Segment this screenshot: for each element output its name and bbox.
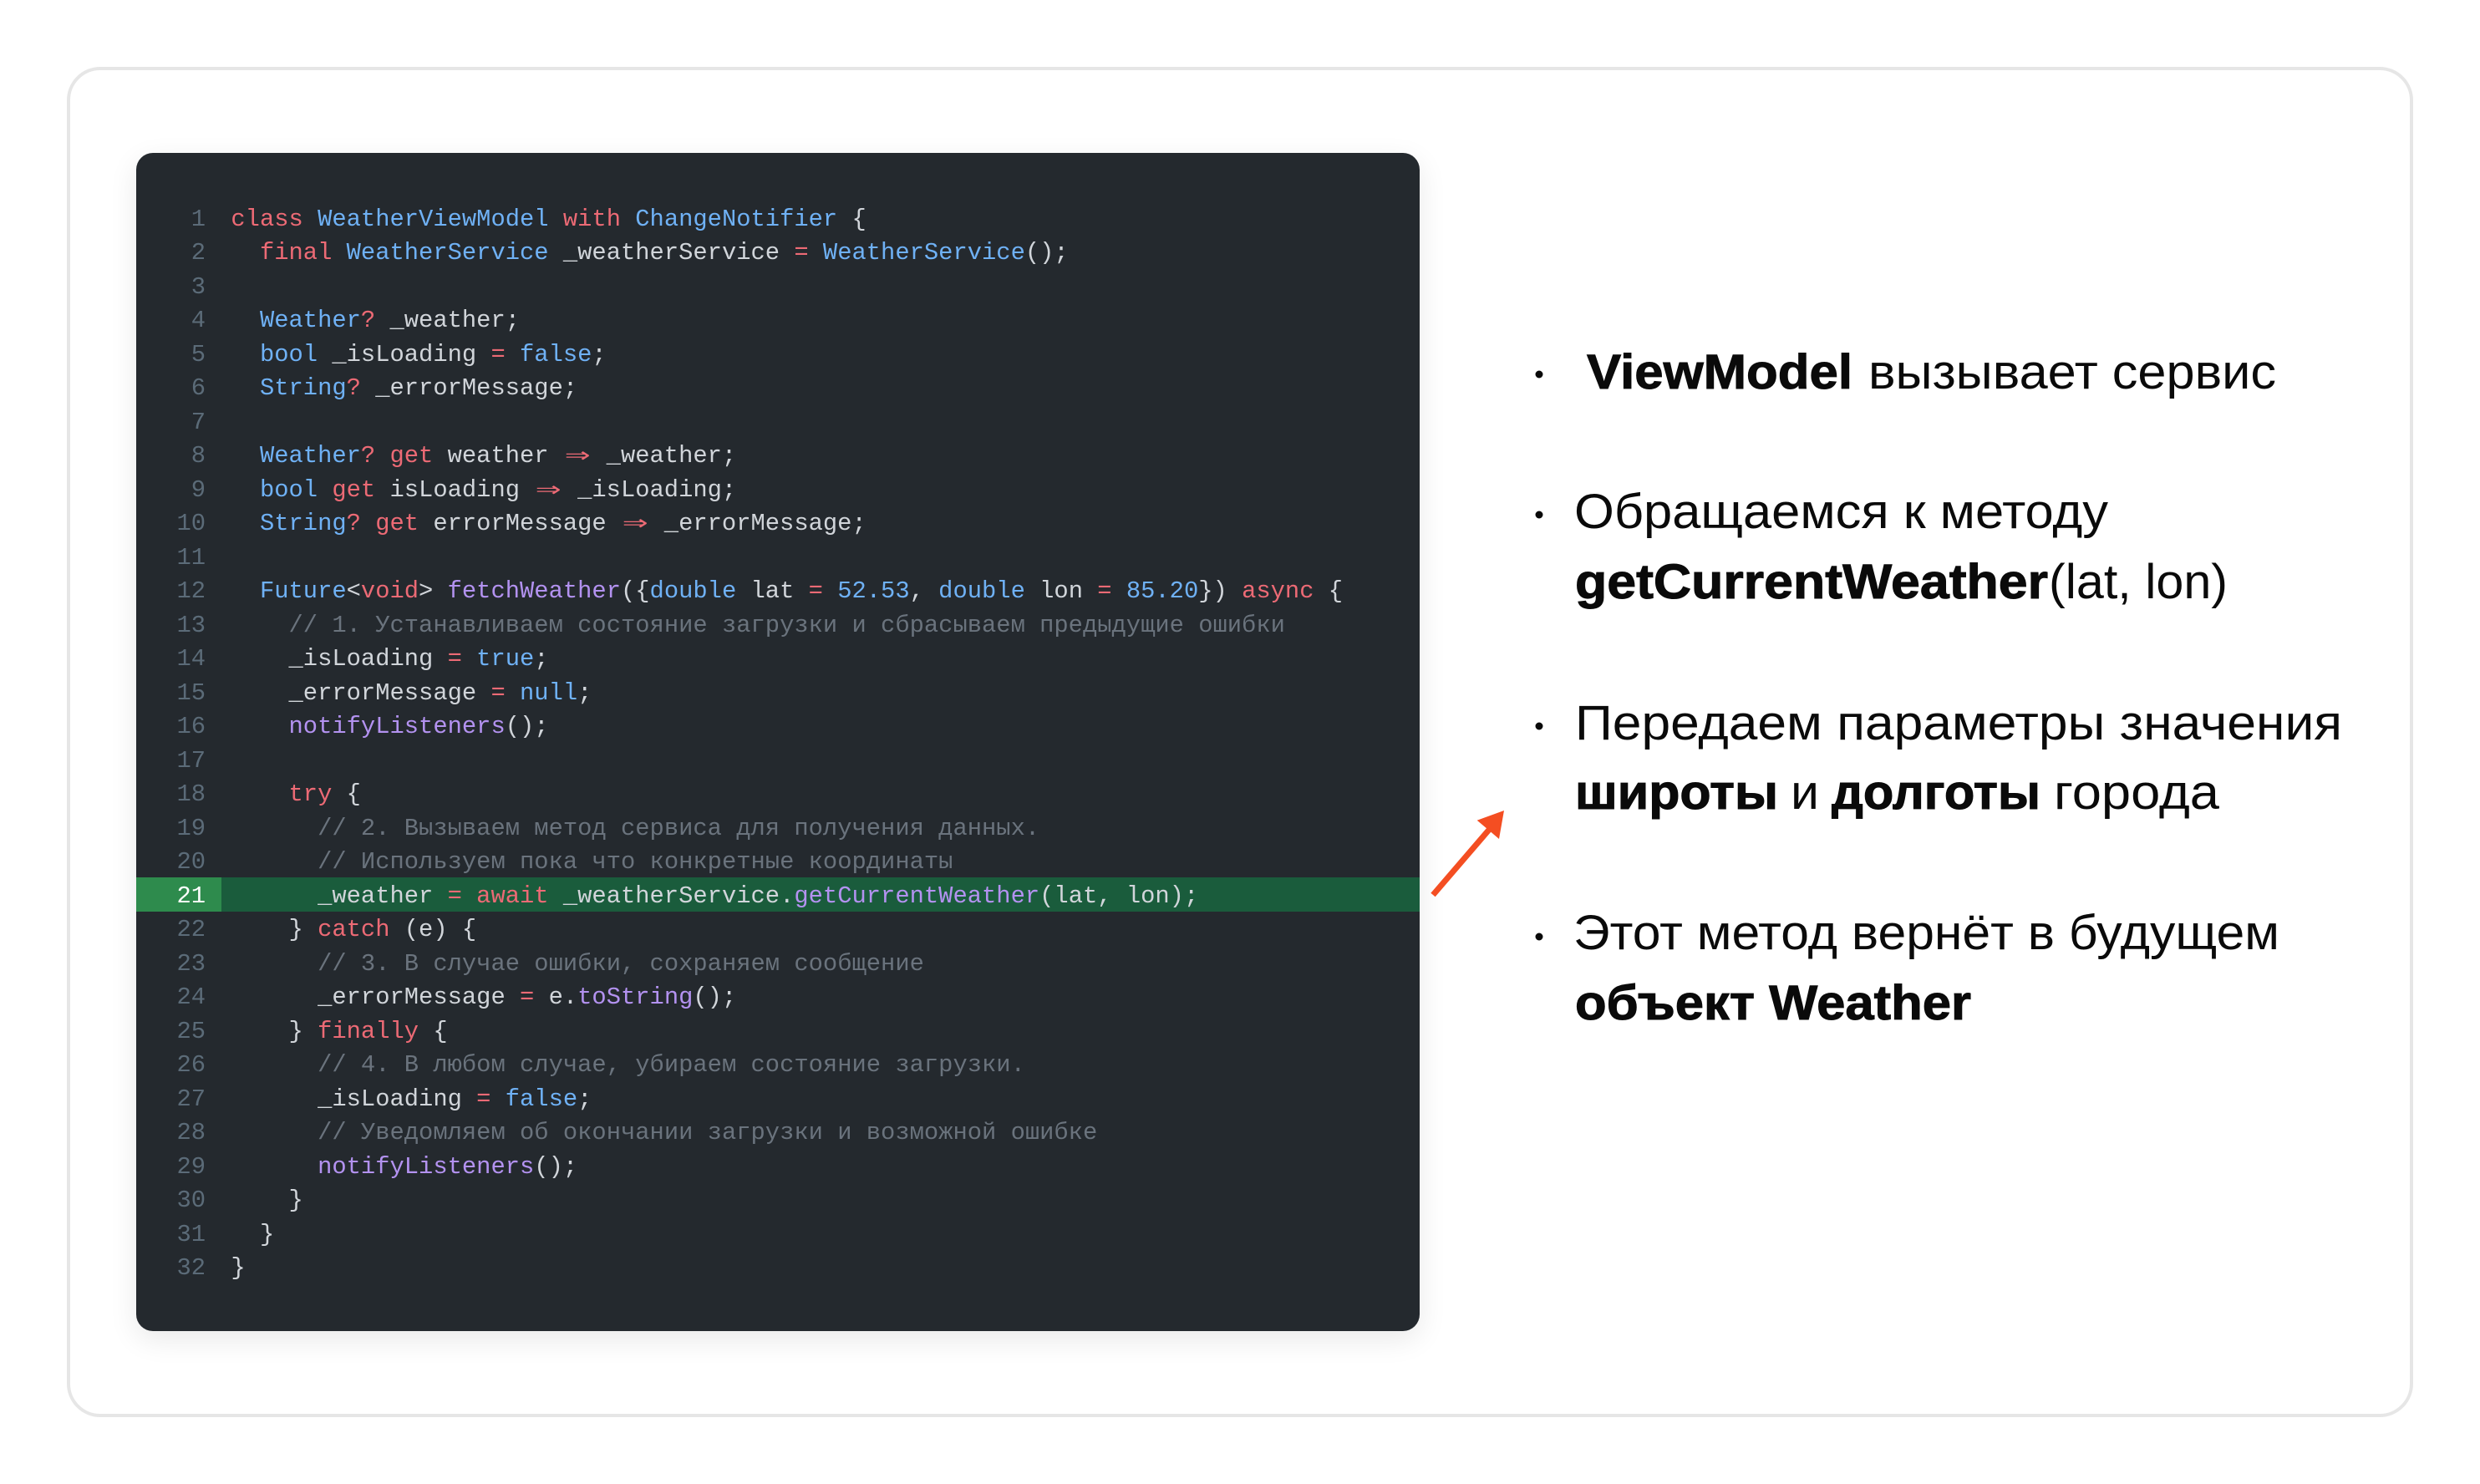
code text: String? _errorMessage;	[260, 374, 577, 402]
bullet: method: Обращаемся к методу	[1574, 485, 2108, 539]
code text: _isLoading = false;	[318, 1085, 592, 1113]
code text: _weather = await _weatherService.getCurrentWeather(lat, lon);	[318, 882, 1198, 909]
bullet: ViewModel: вызывает сервис	[1868, 345, 2276, 399]
arrow	[1433, 811, 1504, 895]
code text: // Уведомляем об окончании загрузки и возможной ошибке	[318, 1119, 1097, 1146]
code text: final WeatherService _weatherService = WeatherService();	[260, 239, 1069, 267]
code text: }	[260, 1220, 274, 1248]
bullet: parameters: долготы	[1832, 765, 2040, 820]
code text: String? get errorMessage _errorMessage;	[260, 510, 866, 537]
code text: // 2. Вызываем метод сервиса для получения данных.	[318, 814, 1039, 842]
code text: // 4. В любом случае, убираем состояние загрузки.	[318, 1051, 1025, 1079]
code text: bool get isLoading _isLoading;	[260, 476, 736, 503]
bullet: parameters	[1536, 696, 2342, 820]
panel: code editor	[136, 153, 1420, 1331]
code text: Future<void> fetchWeather({double lat = 52.53, double lon = 85.20}) async {	[260, 577, 1343, 605]
bullet: method	[1536, 485, 2228, 609]
code text: // 3. В случае ошибки, сохраняем сообщение	[318, 949, 924, 978]
bullet: parameters: и	[1791, 765, 1819, 820]
code text: try {	[289, 780, 361, 808]
code text	[231, 206, 1343, 1282]
highlighted line number background	[136, 877, 221, 912]
bullet: result: Этот метод вернёт в будущем	[1573, 906, 2279, 960]
code text: Weather? get weather _weather;	[260, 442, 736, 470]
bullet: parameters: Передаем параметры значения	[1575, 696, 2342, 750]
code text: _errorMessage = null;	[289, 678, 592, 707]
code text: }	[289, 1187, 303, 1214]
code text: } catch (e) {	[289, 916, 476, 943]
line numbers: 1 2 3 4 5 6 7 8 9 10 11 12 13 14 15 16 17 18 19 20 21 22 23 24 25 26 27 28 29 30 31 32	[176, 206, 206, 1282]
code text: ⇒	[623, 506, 648, 537]
bullet: parameters: широты	[1575, 765, 1778, 820]
code text: _errorMessage = e.toString();	[318, 983, 736, 1011]
code text: _isLoading = true;	[289, 645, 549, 673]
bullet: method: getCurrentWeather	[1575, 555, 2048, 609]
bullet: result: объект Weather	[1575, 976, 1971, 1030]
code text: } finally {	[289, 1018, 448, 1044]
code text: bool _isLoading = false;	[260, 341, 607, 368]
bullet: parameters: города	[2054, 765, 2220, 820]
bullet: method: (lat, lon)	[2049, 555, 2228, 609]
code text: ⇒	[565, 438, 590, 470]
code text: Weather? _weather;	[260, 307, 520, 334]
code text: // 1. Устанавливаем состояние загрузки и сбрасываем предыдущие ошибки	[289, 612, 1285, 638]
code text: }	[231, 1254, 246, 1282]
code text: ⇒	[536, 472, 562, 503]
bullet: ViewModel: ViewModel	[1587, 345, 1852, 399]
code text: class WeatherViewModel with ChangeNotifier {	[231, 206, 866, 232]
bullet: result	[1536, 906, 2279, 1030]
code text: notifyListeners();	[289, 713, 549, 740]
code text: // Используем пока что конкретные координаты	[318, 848, 953, 876]
code text: notifyListeners();	[318, 1153, 577, 1180]
bullet: ViewModel	[1536, 345, 2276, 399]
highlighted code line 21	[136, 877, 1420, 912]
